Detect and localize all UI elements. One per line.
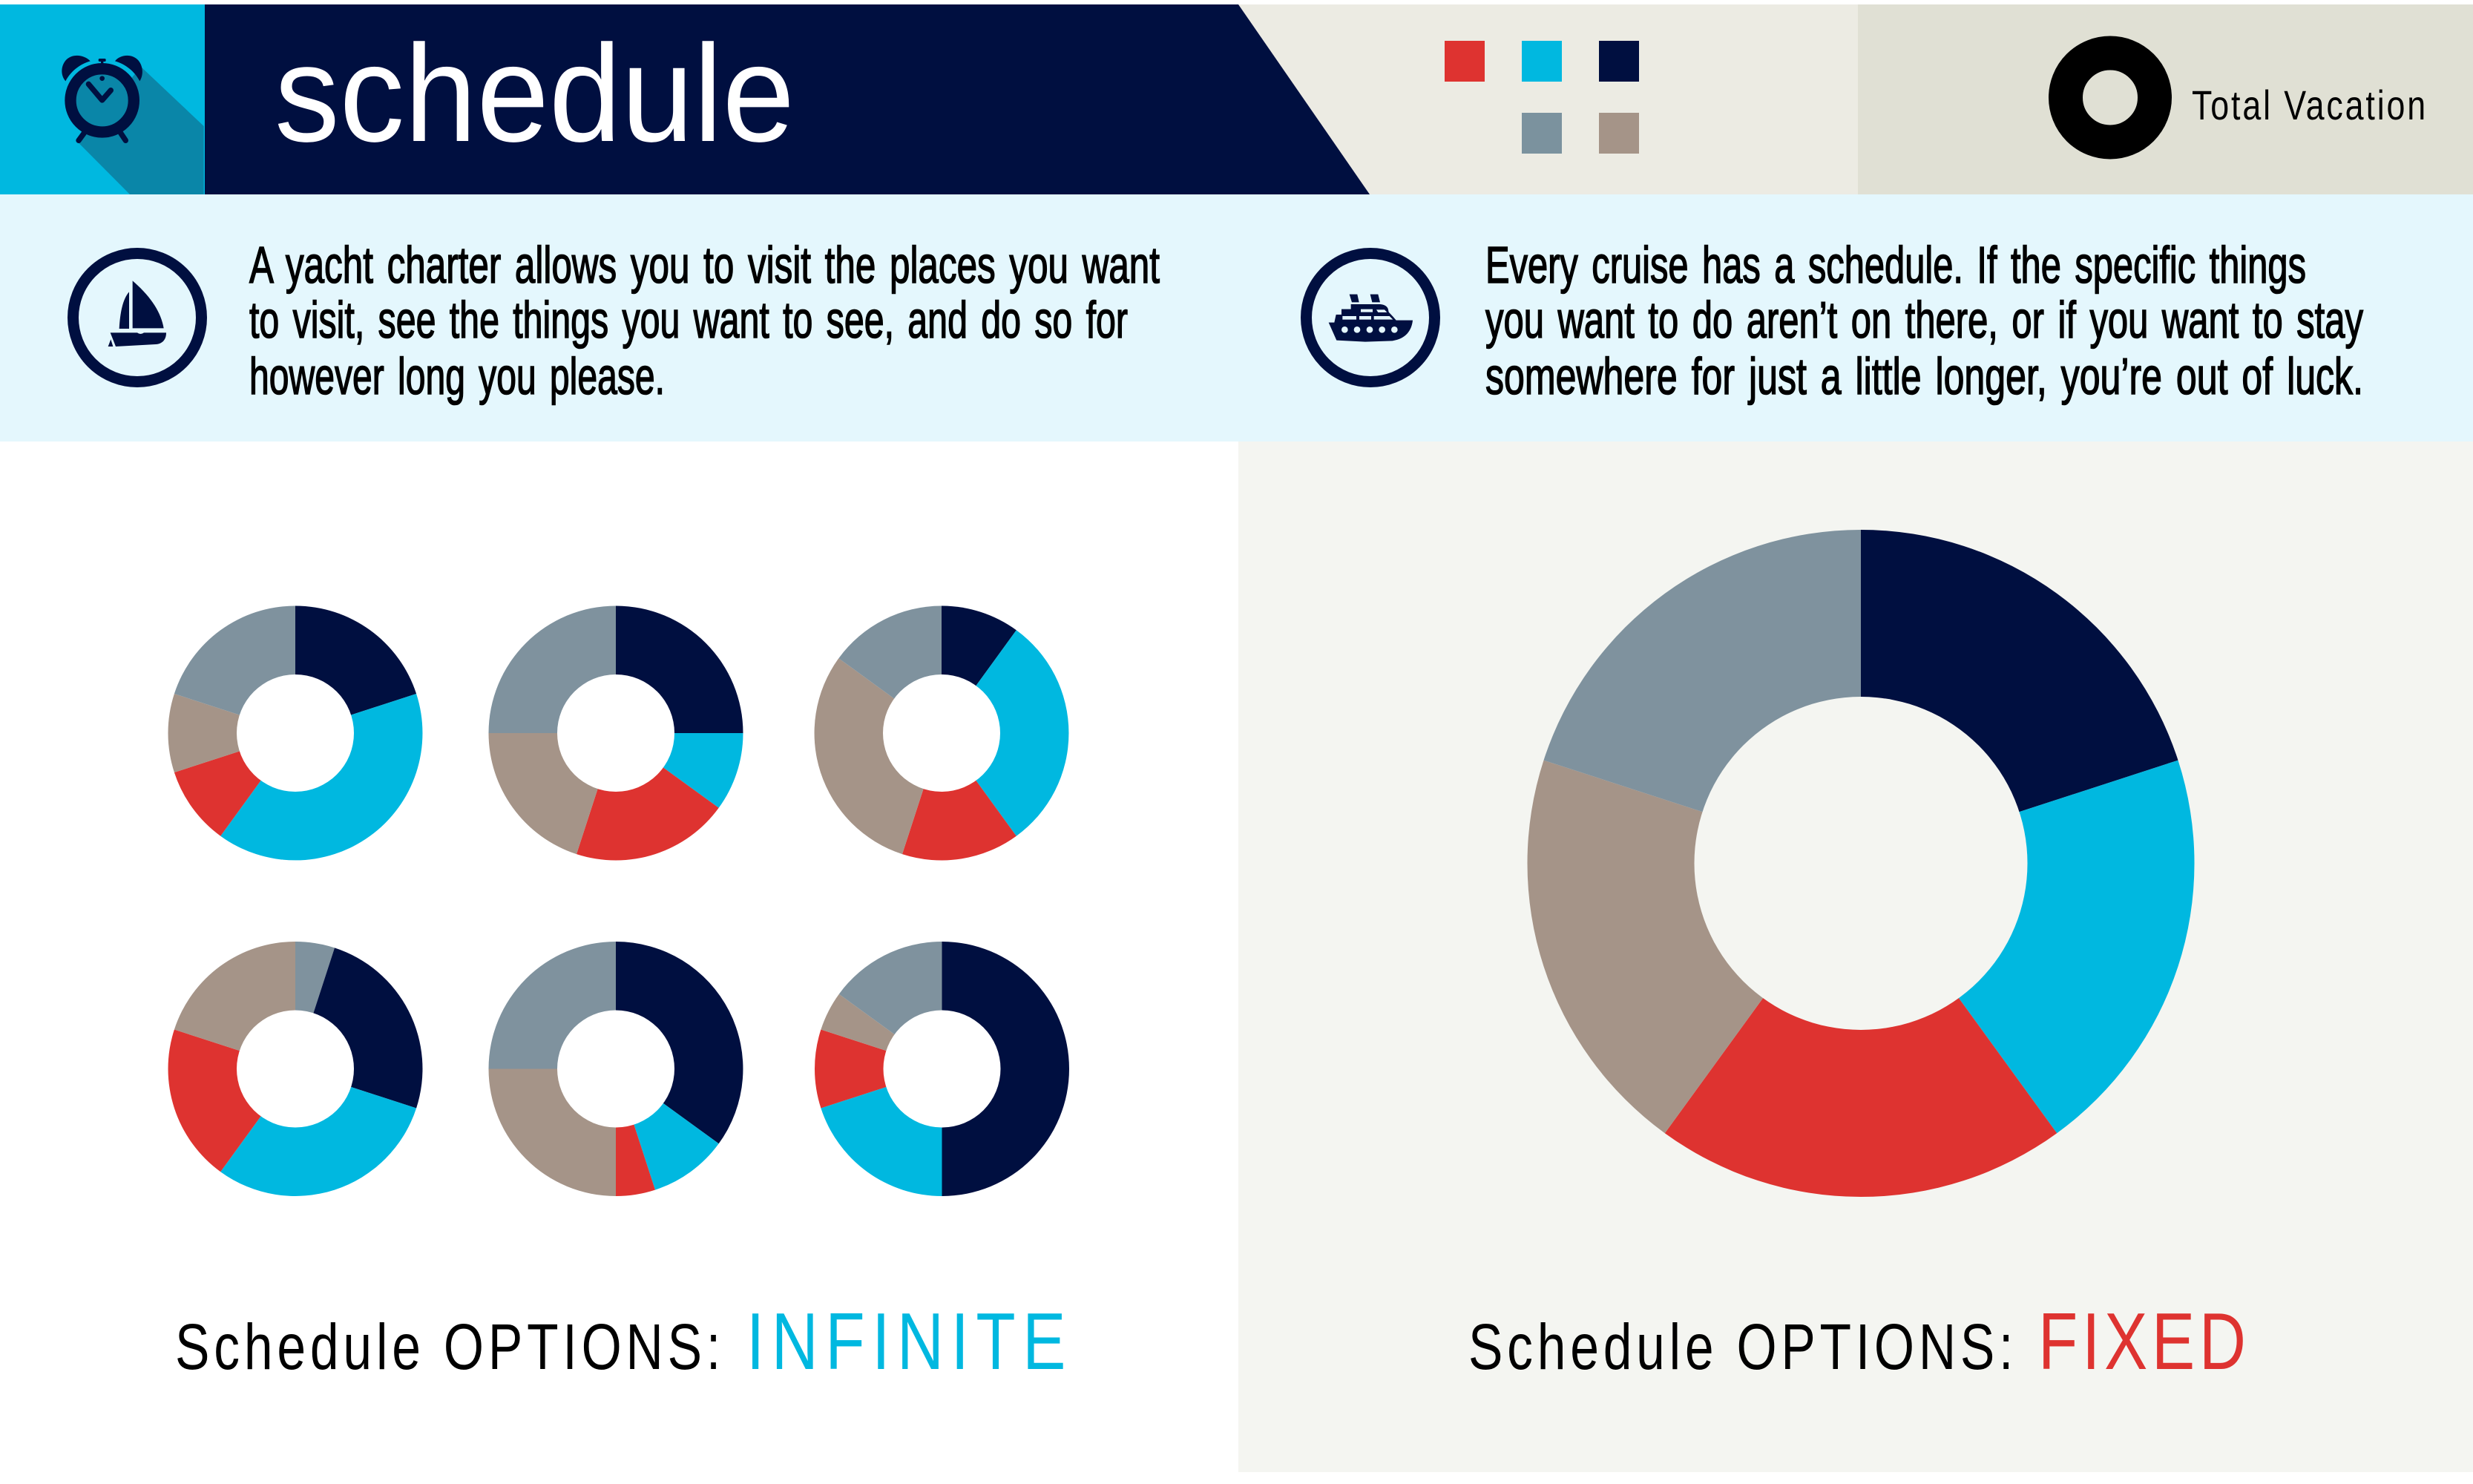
legend ring: total vacation [2066,53,2155,142]
text: yacht charter [249,236,1160,405]
caption: schedule options infinite: INFINITE [746,1296,1065,1386]
caption: schedule options infinite [175,1296,1065,1386]
donut chart 3 [815,605,1068,860]
caption: schedule options infinite: Schedule OPTIONS: [175,1311,720,1383]
text: cruise schedule [1485,236,2363,405]
donut chart 5 [488,942,743,1196]
text: yacht charter: A yacht charter allows you to visit the places you want [249,236,1160,294]
donut chart 6 [815,942,1069,1196]
text: yacht charter: to visit, see the things you want to see, and do so for [249,291,1128,349]
title: schedule [275,17,795,171]
large donut chart [1527,530,2195,1197]
icon tile: alarm clock [0,4,205,194]
caption: schedule options fixed: Schedule OPTIONS: [1468,1311,2013,1383]
legend swatches [1445,41,1639,154]
legend label: Total Vacation [2192,82,2426,128]
panel: infinite yacht schedule options [0,441,1238,1472]
header band [0,4,2473,194]
info band [0,194,2473,441]
text: yacht charter: however long you please. [249,347,665,405]
icon: sailboat in circle [73,254,202,381]
icon: cruise ship in circle [1306,254,1435,381]
donut chart 1 [168,605,422,860]
caption: schedule options fixed: FIXED [2038,1296,2246,1386]
caption: schedule options fixed [1468,1296,2246,1386]
panel: fixed cruise schedule [1238,441,2473,1472]
donut chart 4 [168,942,422,1196]
donut chart 2 [488,605,743,860]
title banner [205,4,1370,194]
